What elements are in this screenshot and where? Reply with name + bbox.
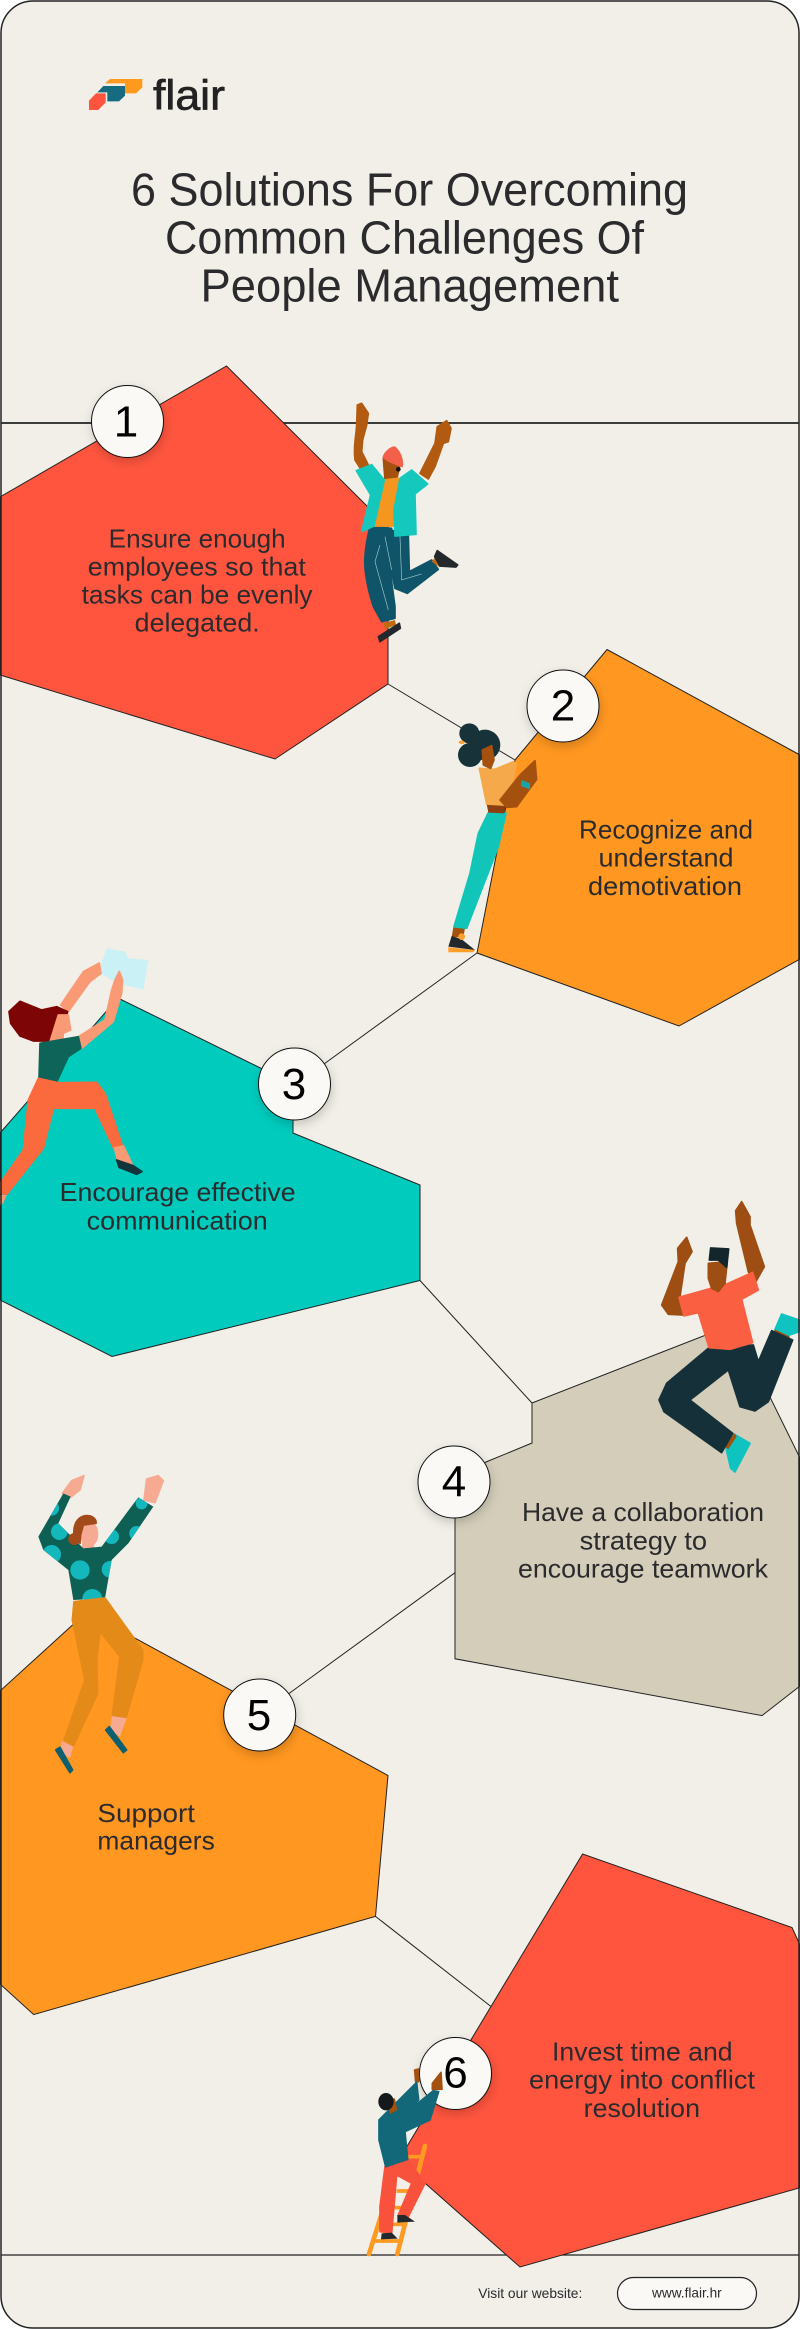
text 6: Invest time and [552,2036,733,2066]
title: 6 Solutions For Overcoming [131,164,688,216]
title: People Management [200,260,619,312]
bottom horizontal line [1,2254,799,2256]
text 6 [529,2036,756,2123]
hexagon 4: beige [455,1324,800,1716]
hexagon 2: orange [477,650,800,1026]
figure 4: jumping man in red t-shirt [659,1202,799,1472]
figure 2: woman with curly hair leaning on hexagon [448,723,537,952]
title: Common Challenges Of [165,212,644,264]
website button [618,2278,756,2310]
text 2 [579,815,753,901]
number badge 6: 6 [443,2048,468,2098]
text 1: delegated. [135,608,260,638]
number badge 5: 5 [247,1691,271,1740]
text 1: employees so that [88,552,307,582]
text 3: communication [87,1206,268,1236]
text 1 [82,524,313,638]
number badge 2 [527,670,599,742]
text 4: strategy to [580,1525,707,1555]
footer label: Visit our website: [478,2285,582,2301]
number badge 2: 2 [551,682,575,730]
top horizontal line [1,422,799,424]
number badge 3 [258,1048,330,1120]
number badge 1: 1 [114,398,138,446]
text 4 [518,1497,769,1584]
logo [89,71,225,118]
text 3: Encourage effective [60,1177,296,1207]
number badge 4: 4 [442,1458,466,1506]
figure 3: woman with red hair holding paper [0,948,148,1205]
text 1: Ensure enough [109,524,286,554]
text 6: resolution [584,2093,700,2123]
logo wordmark: flair [153,71,225,118]
text 2: demotivation [588,871,742,901]
text 5 [97,1798,215,1856]
number badge 6 [420,2038,492,2110]
ladder [369,2146,425,2254]
hexagon 3: teal [0,998,420,1356]
figure 1: jumping man with red beanie [354,403,458,642]
text 2: Recognize and [579,815,753,845]
text 5: Support [97,1798,196,1828]
logo mark [89,79,142,110]
number badge 3: 3 [282,1060,306,1109]
connector lines [289,684,532,2006]
text 6: energy into conflict [529,2065,756,2095]
title [131,164,688,312]
text 4: Have a collaboration [522,1497,764,1527]
website button: www.flair.hr [651,2284,722,2300]
text 1: tasks can be evenly [82,580,313,610]
text 2: understand [598,843,734,873]
hexagon 6: red [399,1854,800,2267]
text 4: encourage teamwork [518,1554,769,1584]
figure 5: woman in polka-dot sweater [38,1476,163,1773]
number badge 4 [418,1446,490,1518]
hexagon 1: red [0,366,388,759]
hexagon 5: orange [0,1612,388,2015]
text 5: managers [97,1826,215,1856]
number badge 1 [92,386,164,458]
text 3 [60,1177,296,1236]
figure 6: man climbing ladder [369,2069,442,2254]
number badge 5 [224,1679,296,1751]
